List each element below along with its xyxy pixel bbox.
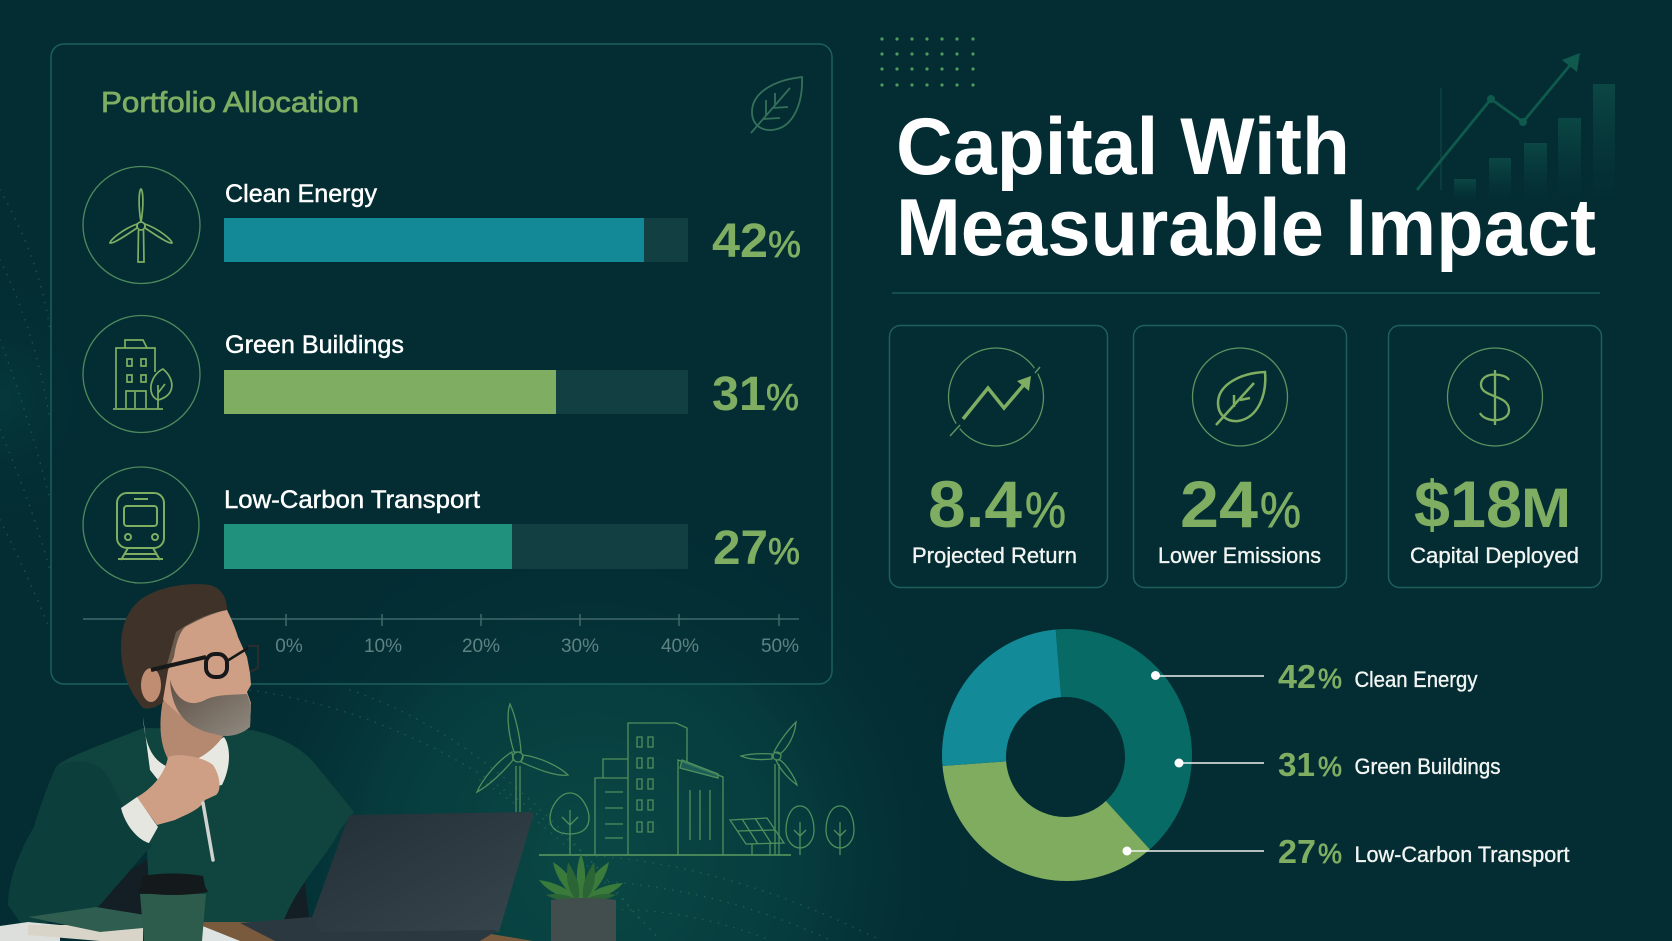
value: $18M: $18 — [1414, 467, 1522, 541]
row: green buildings — [83, 316, 799, 432]
label: projected return: Projected Return — [912, 543, 1077, 568]
value: 42%: % — [768, 224, 801, 265]
coffee cup — [138, 874, 208, 941]
legend: clean energy: Clean Energy — [1354, 667, 1478, 692]
title: Measurable Impact — [896, 183, 1596, 273]
label: clean energy: Clean Energy — [225, 180, 377, 208]
beard — [170, 680, 251, 736]
value: 24%: 24 — [1180, 467, 1258, 541]
title decoration: dot grid — [880, 37, 975, 87]
plant — [539, 853, 623, 941]
legend: low-carbon transport: % — [1318, 838, 1342, 869]
value: 27% — [713, 522, 800, 575]
legend: green buildings: Green Buildings — [1354, 754, 1500, 779]
legend: low-carbon transport: Low-Carbon Transport — [1354, 842, 1570, 867]
label: green buildings: Green Buildings — [225, 331, 404, 359]
row: low-carbon transport — [83, 467, 800, 583]
laptop — [240, 812, 533, 941]
value: 42% — [712, 215, 801, 268]
icon: green building — [83, 316, 200, 432]
legend: low-carbon transport — [1122, 833, 1570, 870]
axis: 20% — [462, 636, 500, 657]
glasses — [151, 646, 258, 677]
label: lower emissions: Lower Emissions — [1158, 543, 1321, 568]
value: 8.4%: % — [1025, 482, 1066, 538]
icon: leaf — [1192, 348, 1288, 446]
value: 8.4%: 8.4 — [928, 467, 1022, 541]
icon: leaf — [751, 77, 802, 133]
value: 24%: % — [1260, 482, 1301, 538]
title — [896, 102, 1596, 273]
value: 31% — [712, 368, 799, 421]
value: 27%: 27 — [713, 522, 768, 575]
axis — [83, 614, 799, 657]
icon: growth arrow — [948, 348, 1044, 446]
card: projected return — [890, 326, 1108, 588]
axis: 0% — [275, 636, 303, 657]
table — [200, 922, 533, 941]
hair — [121, 584, 228, 709]
value: 42%: 42 — [712, 215, 768, 268]
grey temple hair — [166, 610, 228, 668]
card: capital deployed — [1388, 326, 1602, 588]
donut chart — [942, 629, 1192, 881]
book — [0, 907, 240, 941]
label: low-carbon transport: Low-Carbon Transport — [224, 486, 480, 514]
value: $18M: M — [1521, 476, 1571, 539]
legend: clean energy — [1151, 658, 1478, 695]
value: 27%: % — [768, 531, 800, 572]
axis: 50% — [761, 636, 799, 657]
card: lower emissions — [1134, 326, 1346, 588]
legend: clean energy: % — [1318, 663, 1342, 694]
neck — [160, 700, 226, 765]
divider — [892, 292, 1600, 294]
axis: 40% — [661, 636, 699, 657]
illustration: green city line art — [477, 704, 854, 855]
value: 31%: 31 — [712, 368, 766, 421]
panel: portfolio allocation — [51, 44, 832, 684]
icon: dollar — [1448, 348, 1542, 446]
bar: green buildings 31% — [224, 370, 688, 414]
legend: green buildings: 31 — [1278, 746, 1315, 783]
hand and cuff — [137, 755, 220, 825]
title decoration: rising chart — [1417, 53, 1615, 201]
legend: green buildings — [1174, 746, 1500, 783]
row: clean energy — [83, 166, 801, 284]
heading: portfolio allocation: Portfolio Allocation — [101, 87, 359, 119]
shirt collar — [143, 717, 229, 795]
chair shadow — [100, 845, 310, 925]
illustration: man at laptop — [8, 584, 354, 925]
axis: 10% — [364, 636, 402, 657]
sweater arm — [8, 761, 152, 925]
value: 24% — [1180, 467, 1301, 541]
sweater torso — [56, 728, 354, 922]
title: Capital With — [896, 102, 1350, 192]
icon: train — [83, 467, 199, 583]
face — [163, 610, 251, 735]
bar: low-carbon transport 27% — [224, 524, 688, 569]
legend: clean energy: 42 — [1278, 658, 1316, 695]
bar: clean energy 42% — [224, 218, 688, 262]
value: 8.4% — [928, 467, 1066, 541]
ear — [141, 668, 161, 702]
legend: low-carbon transport: 27 — [1278, 833, 1316, 870]
label: capital deployed: Capital Deployed — [1410, 543, 1579, 568]
axis: 30% — [561, 636, 599, 657]
value: 31%: % — [766, 377, 799, 418]
icon: wind turbine — [83, 166, 200, 284]
legend: green buildings: % — [1318, 751, 1342, 782]
pen — [203, 803, 213, 860]
